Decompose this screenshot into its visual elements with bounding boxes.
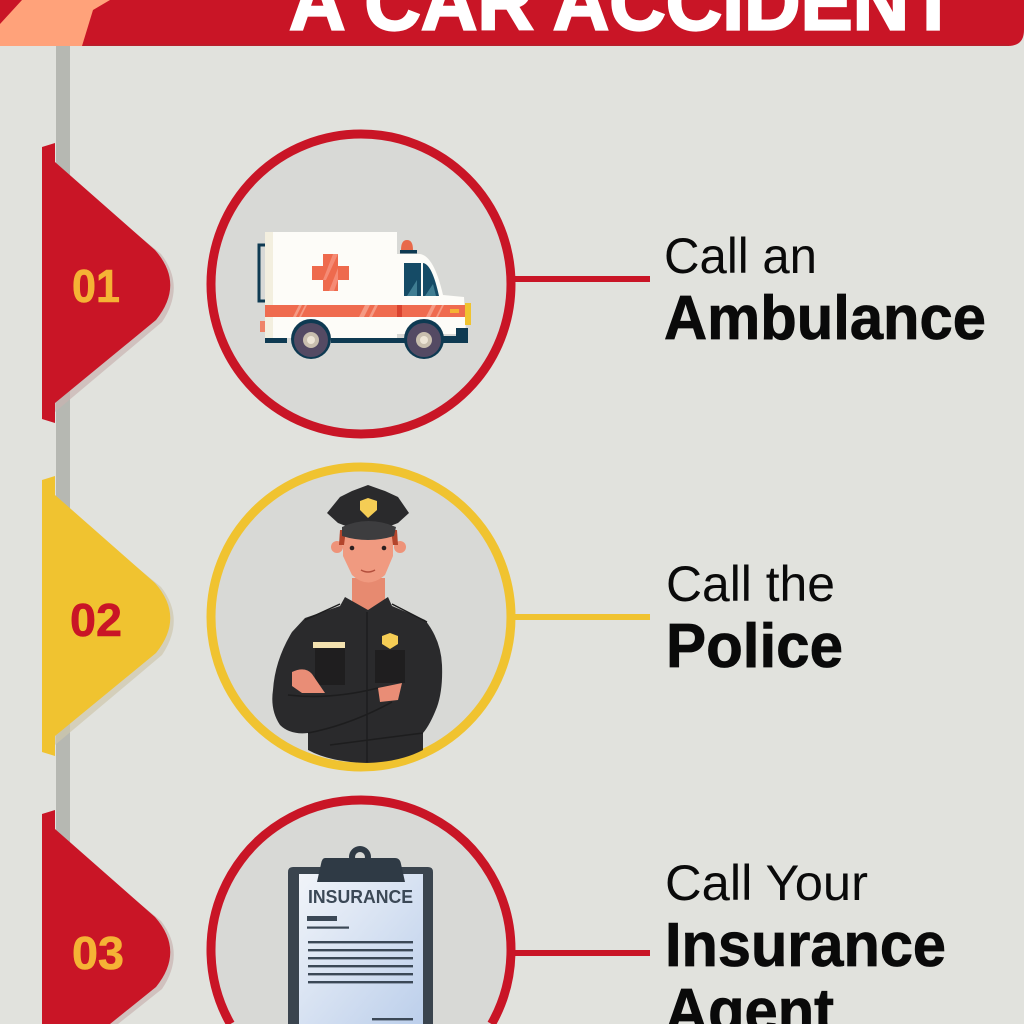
text block 2: Police (666, 612, 843, 681)
circle 3 ring (211, 800, 511, 1024)
text block 1: Ambulance (664, 284, 986, 353)
timeline pole (56, 46, 70, 1024)
circle 3 (211, 800, 511, 1024)
step 2 flag (42, 476, 174, 756)
step 3 flag (42, 810, 174, 1024)
step 1 flag (42, 143, 174, 423)
circle 2 (211, 467, 511, 767)
text block 1: Call an (664, 228, 817, 284)
connector 1 (512, 276, 650, 282)
step number 01: 01 (72, 260, 120, 312)
text block 2: Call the (666, 556, 835, 612)
text block 3: Call Your (665, 855, 868, 911)
text block 3: Insurance (665, 911, 946, 980)
text block 2 (666, 556, 843, 681)
icon: insurance clipboard (288, 846, 433, 1024)
icon: ambulance (259, 232, 471, 359)
text block 1 (664, 228, 986, 353)
connector 2 (512, 614, 650, 620)
header banner (0, 0, 1024, 46)
step number 02: 02 (70, 594, 122, 646)
insurance label: INSURANCE (308, 887, 413, 907)
icon: hand corner (0, 0, 110, 46)
text block 3 (665, 855, 946, 1024)
step number 03: 03 (72, 927, 124, 979)
connector 3 (512, 950, 650, 956)
icon: police officer (272, 485, 442, 763)
circle 1 (211, 134, 511, 434)
